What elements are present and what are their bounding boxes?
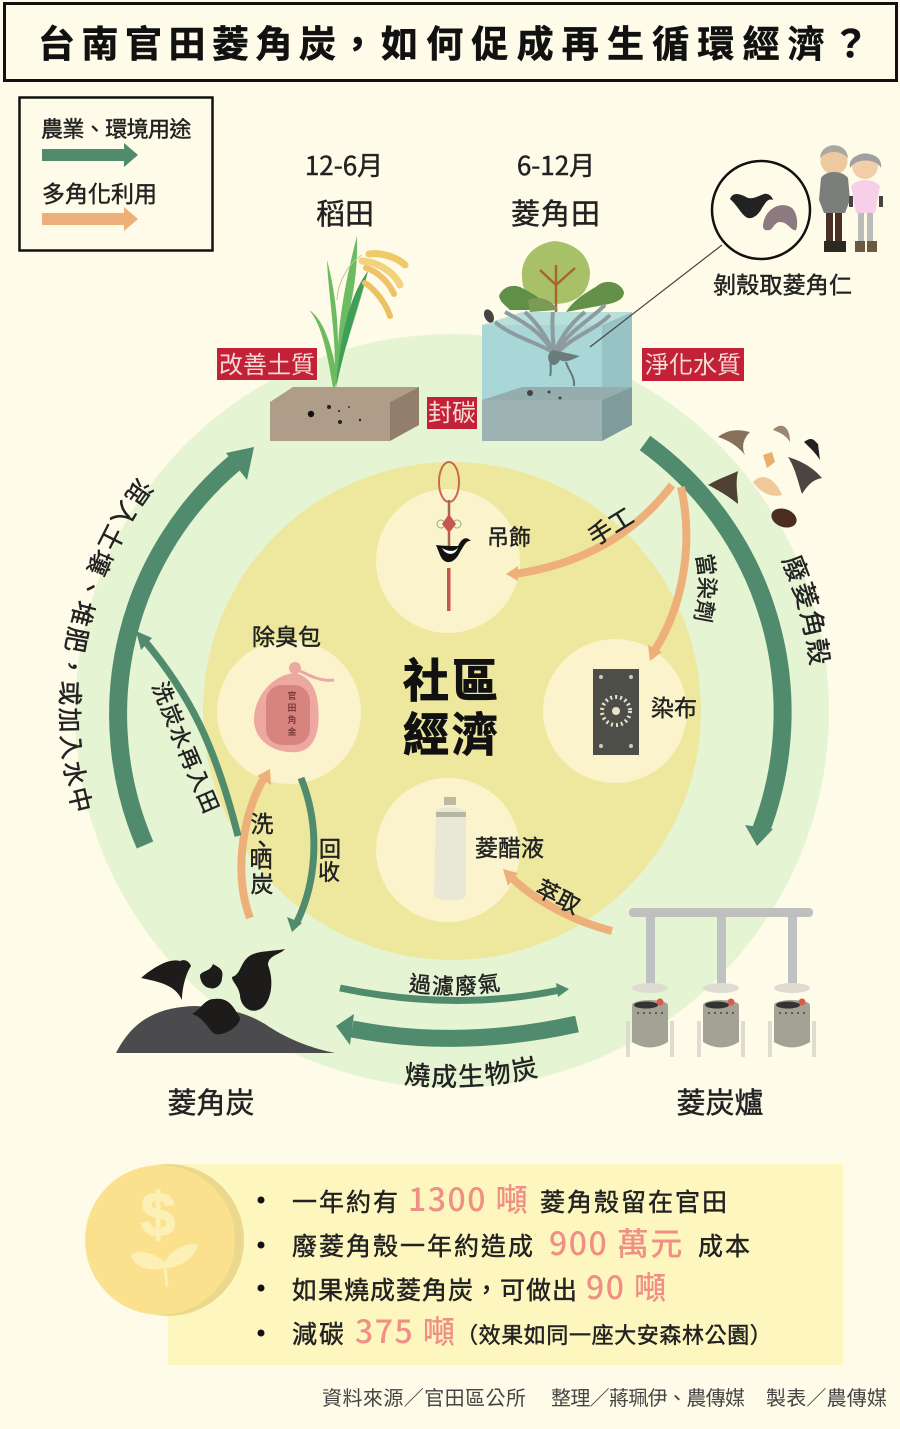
label: burn to biochar: 燒成生物炭 [404,1056,538,1088]
title: 如何促成再生循環經濟 [381,14,833,68]
water caltrop field block [482,312,632,441]
fact: 1300 tons: 菱角殼留在官田 [540,1183,729,1219]
icon: deodorant bag: 金 [287,725,297,738]
label: mix into soil: 混入土壤、堆肥，或加入水中 [58,478,154,811]
fact: 375 tons: 減碳 [292,1315,346,1351]
rice paddy soil block [270,387,419,441]
icon: coin: $ [141,1181,175,1250]
arrow: handcraft [506,485,672,581]
fact: 1300 tons: 一年約有 [292,1183,400,1219]
fact: 375 tons: （效果如同一座大安森林公園） [456,1318,772,1350]
title: 台南官田菱角炭 [38,14,342,68]
heading: rice season: 稻田 [316,191,374,233]
callout: shelling caltrop kernel [590,161,810,347]
label: shelling: 剝殼取菱角仁 [713,266,852,300]
label: extraction: 萃取 [531,870,587,921]
label: recycle: 收 [318,855,340,887]
label: filter exhaust: 過濾廢氣 [408,972,500,996]
legend [20,98,212,250]
heading: water caltrop season [511,146,601,233]
label: wash and dry charcoal: 炭 [250,865,274,899]
arrow: extraction [503,869,612,931]
label: dye: 當染劑 [693,554,718,622]
label: wash and dry charcoal [250,805,274,899]
arrow: filter exhaust [340,983,569,1001]
heading: rice season [305,146,383,233]
small circle: wood vinegar [376,778,520,922]
heading: community economy [403,645,501,765]
outer green ring [75,334,829,1088]
heading: water caltrop season: 菱角田 [511,191,601,233]
fact: 9 million: 成本 [698,1227,752,1263]
legend: 多角化利用 [42,175,157,209]
fact: 90 tons: 如果燒成菱角炭，可做出 [292,1271,578,1307]
heading: community economy: 社區 [403,645,501,711]
panel: key figures [85,1164,843,1365]
icon: rice plant [309,236,405,388]
fact: 9 million: 廢菱角殼一年約造成 [292,1227,535,1263]
label: vinegar: 菱醋液 [475,829,544,863]
label: deodorant bag: 除臭包 [252,618,321,652]
small circle: dyed cloth [543,639,687,783]
source credits: 整理／蔣珮伊、農傳媒 [551,1382,745,1411]
fact: 90 tons: 90 噸 [586,1263,668,1309]
small circle: deodorant bag [217,640,361,784]
icon: caltrop charcoal pile [116,949,335,1053]
arrow: discarded shells [645,443,783,846]
heading: rice season: 12-6月 [305,146,383,183]
icon: coin [85,1164,244,1316]
icon: deodorant bag: 田 [287,701,297,714]
icon: vinegar bottle [434,797,466,900]
icon: deodorant bag [254,662,334,752]
source credits: 製表／農傳媒 [766,1382,887,1411]
label: wash and dry charcoal: 晒 [250,840,272,874]
arrow: recycle [287,778,314,932]
icon: scattered shells [708,426,822,531]
title: ？ [832,14,869,68]
label: dyed cloth: 染布 [651,689,697,723]
icon: caltrop charcoal stoves [626,908,816,1057]
label: discarded shells: 廢菱角殼 [780,554,832,666]
arrow: wash and dry [241,769,271,918]
fact: 375 tons [258,1307,772,1353]
arrow: wash water back to field [136,631,238,836]
legend: 農業、環境用途 [41,112,191,144]
label: wash and dry charcoal: 洗 [250,805,274,839]
label: stove: 菱炭爐 [676,1080,764,1122]
label: wash water: 洗炭水再入田 [151,680,220,814]
stove 3 [768,998,816,1057]
tag: improve soil: 改善土質 [219,345,315,380]
tag: purify water: 淨化水質 [645,345,741,380]
icon: dyed cloth [593,669,639,755]
label: recycle [318,832,341,887]
source credits: 資料來源／官田區公所 [322,1382,526,1411]
icon: deodorant bag: 官 [287,689,297,702]
small circle: pendant [376,462,520,633]
label: wash and dry charcoal: 、 [250,825,274,859]
icon: elderly couple [819,145,883,252]
label: pendant: 吊飾 [487,520,531,552]
fact: 375 tons: 375 噸 [355,1307,456,1353]
fact: 9 million [258,1219,752,1265]
label: recycle: 回 [319,832,341,864]
arrow: mix into soil [118,447,254,845]
inner yellow community circle [203,462,701,960]
heading: community economy: 經濟 [403,699,501,765]
tag: carbon sequestration: 封碳 [428,393,476,428]
fact: 90 tons [258,1263,668,1309]
icon: caltrop shell [730,194,773,218]
fact: 9 million: 900 萬元 [549,1219,684,1265]
label: caltrop charcoal: 菱角炭 [167,1080,255,1122]
title: ， [339,14,376,68]
heading: water caltrop season: 6-12月 [517,146,595,183]
label: handcraft: 手工 [580,497,639,552]
icon: pendant [436,462,471,611]
icon: water caltrop plant [482,241,624,386]
title [4,4,896,80]
stove 1 [626,998,674,1057]
arrow: dye [648,487,686,661]
arrow: burn to biochar [336,1014,577,1045]
fact: 1300 tons [258,1175,729,1221]
fact: 1300 tons: 1300 噸 [408,1175,529,1221]
stove 2 [697,998,745,1057]
icon: deodorant bag: 角 [287,713,297,726]
source credits [322,1382,887,1411]
